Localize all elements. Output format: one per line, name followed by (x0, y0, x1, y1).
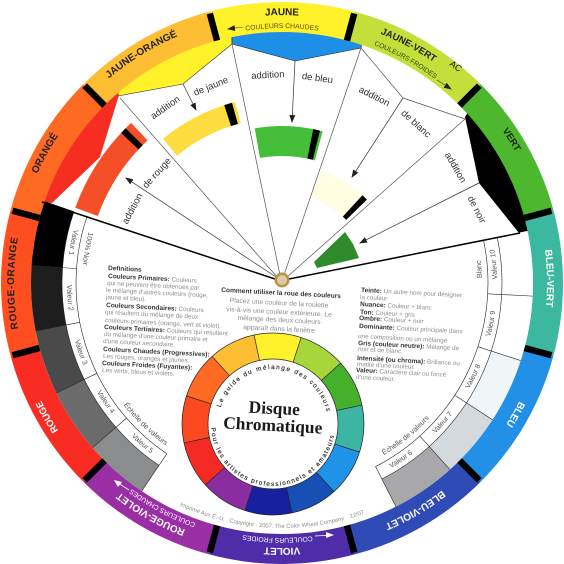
text block: how to use: vis-à-vis une couleur extérieure. Le (226, 306, 332, 319)
value scale labels: Échelle de valeurs (124, 402, 168, 445)
text block: vocabulary: Ombre: Couleur + noir (359, 315, 424, 325)
warm and cool captions: COULEURS CHAUDES (246, 23, 318, 30)
ring labels: ORANGÉ (32, 132, 58, 173)
text block: vocabulary: matité d'une couleur. (357, 361, 415, 371)
swatch: red mix (87, 132, 139, 212)
text block: how to use: mélange des deux couleurs (237, 315, 321, 326)
title: Chromatique (223, 412, 323, 438)
value scale labels: Valeur 3 (76, 339, 88, 364)
text block: definitions: Couleurs Froides (Fuyantes): (102, 360, 192, 372)
text block: how to use (221, 287, 341, 335)
text block: vocabulary (356, 287, 463, 383)
text block: vocabulary: Intensité (ou chroma): Brillance ou (357, 355, 461, 367)
swatch: yellow mix (170, 113, 238, 147)
inner colour wheel (182, 333, 364, 515)
copyright: Imprimé Aux É.-U. Copyright · 2007. The Color Wheel Company 12/07 (180, 502, 363, 528)
circular captions: Pour les artistes professionnels et amateurs (211, 428, 334, 486)
arrows (126, 61, 479, 277)
text block: definitions (102, 265, 228, 378)
value scale labels: Valeur 9 (485, 311, 495, 336)
text block: definitions: jaune et bleu). (105, 294, 146, 303)
text block: how to use: Placez une couleur de la roulette (229, 297, 329, 310)
ring labels: VERT (504, 127, 522, 150)
text block: definitions: Couleurs Tertiaires: Couleurs qui résultent (104, 324, 228, 337)
warm and cool captions: COULEURS CHAUDES (130, 490, 195, 527)
text block: vocabulary: Gris (couleur neutre): Mélange de (358, 340, 460, 352)
addition labels: addition (120, 192, 145, 226)
window: black (465, 105, 530, 233)
ring labels: ROUGE (36, 400, 58, 434)
text block: definitions: d'une couleur secondaire. (103, 338, 175, 349)
text block: vocabulary: Valeur: Caractère clair ou foncé (356, 367, 447, 379)
ring labels: ROUGE-ORANGE (7, 237, 18, 330)
window: yellow (118, 25, 232, 96)
text block: vocabulary: Teinte: Un autre nom pour désigner (361, 287, 462, 299)
window: blue (232, 25, 365, 61)
text block: definitions: couleurs primaires (orange, vert et violet). (105, 317, 222, 330)
text block: definitions: Definitions (108, 265, 142, 274)
swatch: black mix (314, 232, 359, 268)
ring labels: BLEU-VERT (545, 250, 554, 308)
value scale labels: Blanc (476, 260, 482, 278)
circular captions (211, 364, 334, 486)
swatch: white mix (316, 184, 357, 210)
warm and cool captions (74, 23, 492, 543)
ring labels: BLEU (507, 402, 525, 428)
addition labels: de bleu (301, 71, 334, 86)
addition labels: addition (357, 84, 391, 109)
value scale labels: Valeur 4 (98, 390, 115, 414)
radial window lines (42, 44, 520, 279)
value scale swatches (46, 206, 518, 493)
text block: definitions: qui ne peuvent être obtenues par (107, 280, 200, 292)
text block: definitions: Couleurs Chaudes (Progressives): (103, 346, 210, 359)
value scale labels: Valeur 6 (388, 450, 412, 468)
value scale labels (67, 188, 516, 510)
swatch: blue mix (257, 141, 319, 146)
stray mark: AC (448, 58, 464, 74)
text block: vocabulary: Ton: Couleur + gris (360, 309, 415, 319)
ring labels: ROUGE-VIOLET (116, 494, 185, 536)
addition labels (120, 69, 488, 226)
text block: vocabulary: noir et de blanc. (358, 346, 403, 355)
text block: vocabulary: Dominante: Couleur principale dans (359, 323, 463, 335)
value scale labels: Valeur 5 (132, 433, 154, 453)
value scale labels: Valeur 8 (464, 364, 480, 388)
text block: definitions: Les verts, bleus et violets. (102, 367, 175, 378)
value scale labels: Valeur 1 (68, 230, 79, 255)
ring labels: BLEU-VIOLET (387, 490, 446, 530)
value scale labels: Valeur 10 (490, 250, 497, 280)
text block: definitions: Couleurs Secondaires: Couleurs (106, 302, 204, 314)
addition labels: addition (149, 94, 182, 122)
text block: definitions: qui résultent du mélange de deux (105, 309, 199, 321)
text block: vocabulary: une composition ou un mélange (358, 333, 448, 345)
addition labels: de blanc (399, 108, 433, 140)
ring labels: VIOLET (264, 548, 300, 555)
window: red (30, 80, 119, 203)
circular captions: Le guide du mélange des couleurs (216, 364, 330, 412)
text block: vocabulary: Nuance: Couleur + blanc (360, 301, 432, 312)
ring labels: JAUNE-ORANGÉ (106, 28, 178, 78)
warm and cool captions: COULEURS FROIDES (374, 42, 437, 78)
text block: vocabulary: la couleur. (360, 294, 389, 303)
value scale labels: 100% Noir (83, 232, 94, 266)
value scale grid (32, 211, 533, 507)
text block: how to use: Comment utiliser la roue des couleurs (221, 287, 341, 300)
value scale labels: Échelle de valeurs (382, 416, 429, 455)
addition labels: addition (442, 151, 468, 185)
addition labels: de jaune (192, 75, 230, 99)
value scale labels: Valeur 7 (432, 411, 452, 432)
addition labels: addition (251, 69, 285, 82)
text block: how to use: apparaît dans la fenêtre (243, 324, 315, 335)
text block: definitions: Couleurs Primaires: Couleurs (108, 273, 197, 285)
title: Disque (248, 397, 301, 419)
addition labels: de rouge (141, 156, 174, 191)
text block: definitions: le mélange d'autres couleurs (rouge, (106, 287, 208, 299)
addition labels: de noir (465, 194, 488, 225)
text block: definitions: du mélange d'une couleur primaire et (104, 331, 208, 343)
ring labels: JAUNE-VERT (381, 28, 438, 61)
warm and cool captions: COULEURS FROIDES (242, 535, 312, 543)
value scale labels: Valeur 2 (67, 284, 74, 311)
text block: vocabulary: d'une couleur. (356, 374, 395, 383)
title (223, 397, 323, 438)
text block: definitions: Les rouges, oranges et jaunes. (103, 353, 190, 365)
ring labels: JAUNE (265, 8, 298, 16)
pin (274, 272, 290, 288)
